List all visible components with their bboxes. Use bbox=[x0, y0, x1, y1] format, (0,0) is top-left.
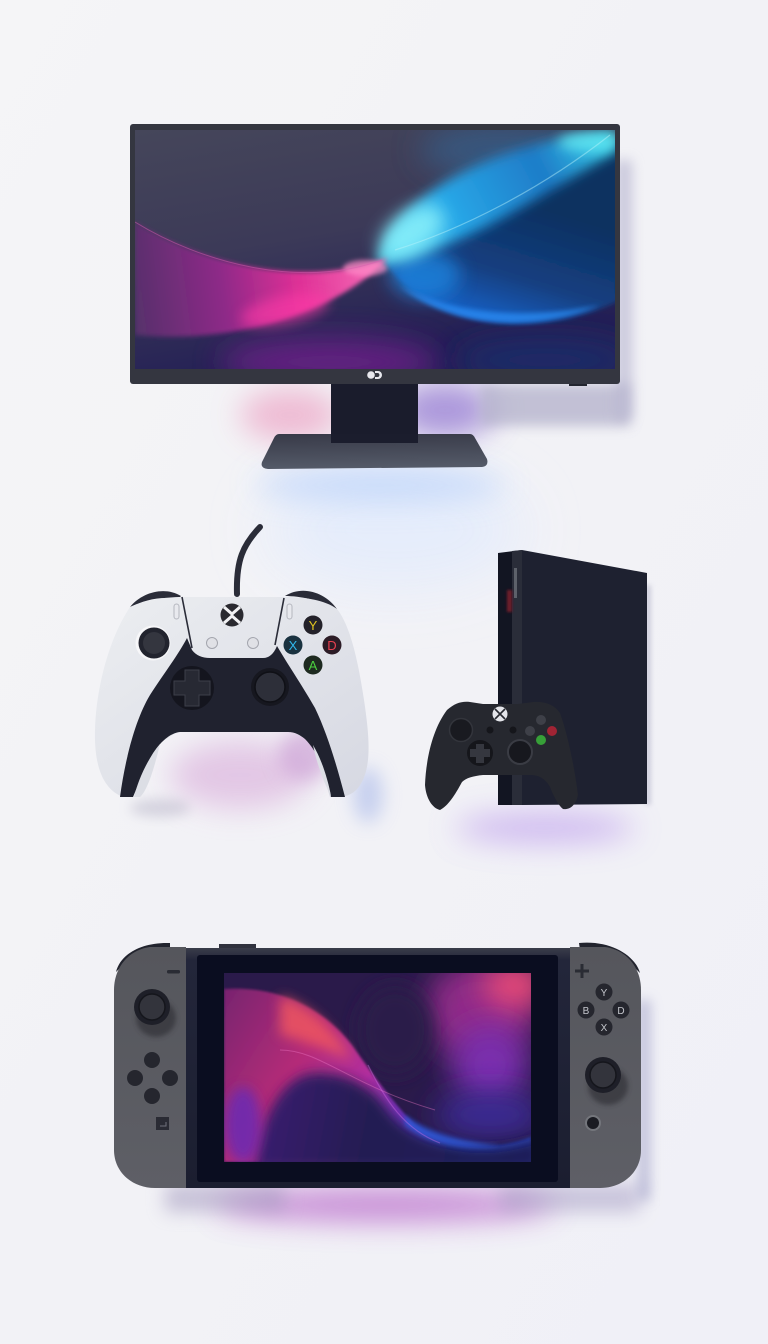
monitor screen bbox=[135, 130, 615, 369]
centre body bbox=[186, 948, 570, 1188]
minus button bbox=[167, 970, 180, 974]
face buttons: X bbox=[289, 638, 298, 653]
right stick bbox=[585, 1057, 628, 1105]
monitor bbox=[130, 122, 635, 469]
screen: bright blue arc bbox=[400, 285, 600, 322]
left bumper bbox=[116, 943, 170, 972]
home button bbox=[585, 1115, 601, 1131]
small controller face buttons bbox=[525, 715, 557, 745]
d-pad bbox=[170, 666, 214, 710]
right stick bbox=[251, 668, 289, 706]
monitor button bbox=[569, 384, 587, 386]
small controller d-pad bbox=[467, 740, 493, 766]
screen: light streaks bbox=[280, 1050, 435, 1110]
plus button bbox=[575, 964, 589, 978]
right grip inner wedge bbox=[313, 745, 331, 796]
controller cable bbox=[237, 527, 260, 594]
top buttons bbox=[219, 944, 256, 948]
screen bbox=[224, 973, 531, 1162]
small controller left stick bbox=[450, 718, 472, 742]
face buttons: Y bbox=[601, 988, 608, 999]
black game console bbox=[498, 550, 647, 805]
left joy-con bbox=[114, 947, 186, 1188]
left stick bbox=[136, 626, 170, 660]
monitor logo bbox=[367, 371, 382, 379]
small menu buttons bbox=[206, 638, 258, 648]
screen: dark centre bbox=[408, 990, 446, 1053]
screen: dark lower lobe bbox=[255, 1073, 540, 1170]
console front spine bbox=[498, 550, 522, 805]
console side face bbox=[522, 550, 647, 805]
shoulder light bars bbox=[174, 604, 179, 619]
left bumper bbox=[130, 591, 181, 607]
face buttons: D bbox=[617, 1006, 625, 1017]
handheld console bbox=[114, 943, 641, 1188]
black bezel bbox=[197, 955, 558, 1182]
controller body bbox=[95, 597, 369, 797]
left grip inner wedge bbox=[134, 744, 160, 797]
console spine edge bbox=[512, 550, 522, 805]
screen: pink swoosh bbox=[135, 222, 388, 337]
face buttons bbox=[578, 984, 630, 1036]
xbox logo button bbox=[220, 604, 244, 626]
monitor frame bbox=[130, 124, 620, 384]
white game controller bbox=[95, 527, 369, 797]
stand neck shadow on base bbox=[331, 434, 418, 443]
monitor stand neck bbox=[331, 384, 418, 443]
controller black centre bbox=[120, 638, 345, 797]
monitor stand base bbox=[262, 434, 487, 469]
right bumper bbox=[285, 591, 337, 609]
screen: red highlight on swoosh bbox=[280, 996, 352, 1060]
top panel seams bbox=[182, 597, 284, 648]
screen: lower dark purple band bbox=[220, 338, 440, 386]
small controller menu buttons bbox=[486, 726, 494, 734]
face buttons: B bbox=[583, 1006, 590, 1017]
screen: top right pink glow bbox=[425, 960, 535, 1060]
right joy-con bbox=[570, 947, 641, 1188]
direction buttons bbox=[127, 1052, 178, 1104]
small controller right stick bbox=[508, 740, 532, 764]
face buttons bbox=[284, 616, 342, 674]
console red light bbox=[507, 590, 512, 612]
screen: grey-blue haze upper right bbox=[417, 130, 570, 178]
screen: navy-blue lower right region bbox=[385, 140, 620, 324]
screen: main swoosh bbox=[224, 989, 531, 1162]
console label bbox=[514, 568, 517, 598]
small controller logo bbox=[492, 706, 508, 722]
right bumper bbox=[579, 943, 640, 973]
screen: left purple bbox=[225, 1087, 261, 1163]
small black controller bbox=[425, 702, 578, 810]
face buttons: X bbox=[601, 1023, 608, 1034]
face buttons: Y bbox=[309, 618, 318, 633]
face buttons: A bbox=[309, 658, 318, 673]
left stick bbox=[134, 989, 176, 1037]
glow and shadows behind devices bbox=[130, 160, 651, 1221]
screen: cyan swoosh bbox=[376, 130, 615, 264]
screen: blue arc bbox=[405, 1115, 500, 1147]
screen: blue glow near centre bbox=[390, 251, 460, 299]
face buttons: D bbox=[327, 638, 337, 653]
capture button bbox=[156, 1117, 169, 1130]
